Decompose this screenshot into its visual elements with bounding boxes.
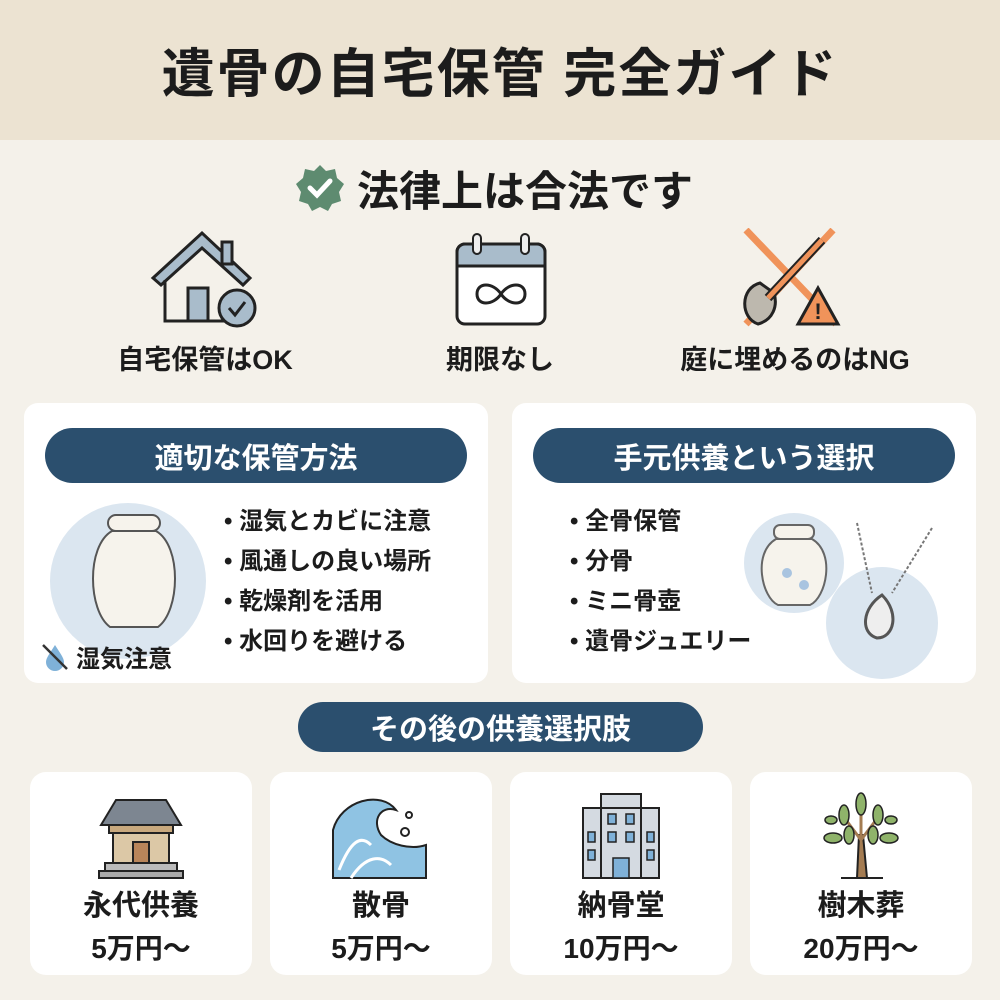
icon: tree: [823, 792, 899, 879]
card: noukotsudou: [510, 772, 732, 975]
card: eitai kuyou: 5万円～: [91, 933, 191, 964]
section pill: options: その後の供養選択肢: [370, 714, 631, 746]
title: 遺骨の自宅保管 完全ガイド: [162, 45, 838, 104]
title: [0, 0, 1000, 140]
card: sankotsu: 5万円～: [331, 933, 431, 964]
heading pill: 手元供養という選択: [613, 442, 874, 474]
card: eitai kuyou: [30, 772, 252, 975]
card: jumokusou: [750, 772, 972, 975]
icon: building: [582, 793, 660, 879]
icon: wave: [332, 798, 427, 879]
bullet list: • 乾燥剤を活用: [224, 588, 383, 615]
icon: house: [150, 231, 256, 328]
bullet list: • 湿気とカビに注意: [224, 508, 431, 535]
icon: temple: [98, 799, 184, 879]
subtitle: legal: 法律上は合法です: [357, 168, 693, 214]
label: garden NG: 庭に埋めるのはNG: [680, 345, 910, 375]
panel: temoto kuyou: [512, 403, 976, 683]
card: eitai kuyou: 永代供養: [83, 890, 199, 922]
caption: humidity: 湿気注意: [76, 646, 172, 673]
card: sankotsu: 散骨: [352, 890, 410, 922]
bullet list: • 全骨保管: [570, 508, 681, 535]
icon: check badge: [296, 165, 344, 211]
label: no limit: 期限なし: [446, 345, 554, 375]
card: jumokusou: 樹木葬: [817, 890, 904, 922]
heading pill: 適切な保管方法: [154, 442, 358, 474]
icon: urn: [50, 503, 206, 659]
bullet list: • 風通しの良い場所: [224, 548, 431, 575]
heading pill: [45, 428, 467, 483]
bullet list: • 分骨: [570, 548, 633, 575]
section pill: options: [298, 702, 703, 752]
bullet list: [224, 508, 431, 655]
card: noukotsudou: 納骨堂: [577, 890, 664, 922]
bullet list: [570, 508, 751, 655]
label: home ok: 自宅保管はOK: [117, 345, 293, 375]
card: noukotsudou: 10万円～: [563, 933, 679, 964]
icon: shovel NG: !: [814, 299, 822, 324]
card: jumokusou: 20万円～: [803, 933, 919, 964]
bullet list: • 遺骨ジュエリー: [570, 628, 751, 655]
caption: humidity: [42, 644, 172, 673]
card: sankotsu: [270, 772, 492, 975]
heading pill: [533, 428, 955, 483]
icon: mini urn and pendant: [744, 513, 938, 679]
icon: shovel NG: [743, 228, 840, 326]
bullet list: • 水回りを避ける: [224, 628, 407, 655]
icon: calendar: [456, 233, 546, 326]
icon: drop crossed: [42, 644, 68, 671]
panel: storage method: [24, 403, 488, 683]
bullet list: • ミニ骨壺: [570, 588, 681, 615]
